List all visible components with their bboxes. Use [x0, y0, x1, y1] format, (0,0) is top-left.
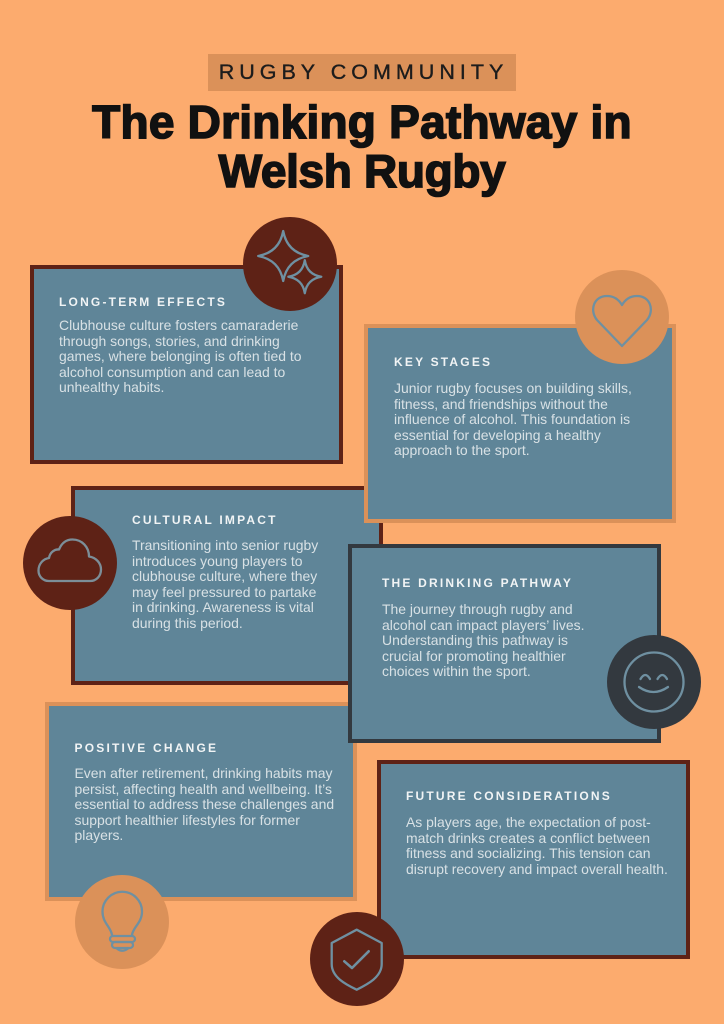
heading: future considerations: FUTURE CONSIDERATIONS	[406, 789, 612, 803]
heading: key stages: KEY STAGES	[394, 355, 492, 369]
text: the drinking pathway: Understanding this pathway is	[382, 632, 568, 648]
icon: sparkles	[243, 217, 337, 311]
text: key stages	[394, 380, 632, 458]
text: long-term effects: Clubhouse culture fosters camaraderie	[59, 317, 298, 333]
text: long-term effects: alcohol consumption and can lead to	[59, 364, 285, 380]
text: positive change: persist, affecting health and wellbeing. It’s	[74, 781, 332, 797]
text: positive change: players.	[74, 827, 123, 843]
text: long-term effects: through songs, stories, and drinking	[59, 333, 280, 349]
text: cultural impact: clubhouse culture, where they	[132, 568, 317, 584]
text: positive change	[74, 765, 334, 843]
text: future considerations: As players age, the expectation of post-	[406, 814, 651, 830]
title: Welsh Rugby	[219, 144, 505, 196]
panel: key stages	[364, 270, 676, 523]
text: long-term effects	[59, 317, 302, 395]
panel: long-term effects	[30, 217, 343, 464]
text: future considerations	[406, 814, 668, 877]
text: the drinking pathway: choices within the sport.	[382, 663, 531, 679]
heading: long-term effects: LONG-TERM EFFECTS	[59, 295, 227, 309]
text: key stages: approach to the sport.	[394, 442, 530, 458]
text: cultural impact	[132, 537, 318, 631]
text: cultural impact: in drinking. Awareness is vital	[132, 599, 314, 615]
text: the drinking pathway: The journey through rugby and	[382, 601, 573, 617]
heading: the drinking pathway: THE DRINKING PATHWAY	[382, 576, 573, 590]
panel: the drinking pathway	[348, 544, 701, 743]
heading: cultural impact: CULTURAL IMPACT	[132, 513, 278, 527]
icon: light bulb	[75, 875, 169, 969]
text: cultural impact: may feel pressured to partake	[132, 584, 316, 600]
text: the drinking pathway: crucial for promoting healthier	[382, 648, 566, 664]
text: key stages: Junior rugby focuses on building skills,	[394, 380, 632, 396]
text: future considerations: fitness and socializing. This tension can	[406, 845, 651, 861]
text: cultural impact: during this period.	[132, 615, 243, 631]
panel: positive change	[45, 702, 357, 969]
text: key stages: essential for developing a healthy	[394, 427, 601, 443]
icon: shield with check	[310, 912, 404, 1006]
icon: heart	[575, 270, 669, 364]
text: long-term effects: games, where belonging is often tied to	[59, 348, 302, 364]
panel: cultural impact	[23, 486, 383, 685]
text: positive change: essential to address these challenges and	[74, 796, 334, 812]
icon: smiley face	[607, 635, 701, 729]
text: future considerations: match drinks creates a conflict between	[406, 830, 650, 846]
text: the drinking pathway: alcohol can impact players’ lives.	[382, 617, 584, 633]
text: positive change: Even after retirement, drinking habits may	[74, 765, 332, 781]
text: cultural impact: introduces young players to	[132, 553, 302, 569]
title	[92, 96, 632, 198]
text: key stages: influence of alcohol. This foundation is	[394, 411, 630, 427]
text: future considerations: disrupt recovery and impact overall health.	[406, 861, 668, 877]
icon: cloud	[23, 516, 117, 610]
panel: future considerations	[310, 760, 690, 1006]
text: the drinking pathway	[382, 601, 584, 679]
text: long-term effects: unhealthy habits.	[59, 379, 164, 395]
text: key stages: fitness, and friendships without the	[394, 396, 608, 412]
tag: rugby community	[208, 54, 516, 91]
heading: positive change: POSITIVE CHANGE	[74, 741, 218, 755]
tag: rugby community: RUGBY COMMUNITY	[219, 60, 508, 84]
text: cultural impact: Transitioning into senior rugby	[132, 537, 318, 553]
text: positive change: support healthier lifestyles for former	[74, 812, 300, 828]
title: The Drinking Pathway in	[92, 96, 632, 148]
